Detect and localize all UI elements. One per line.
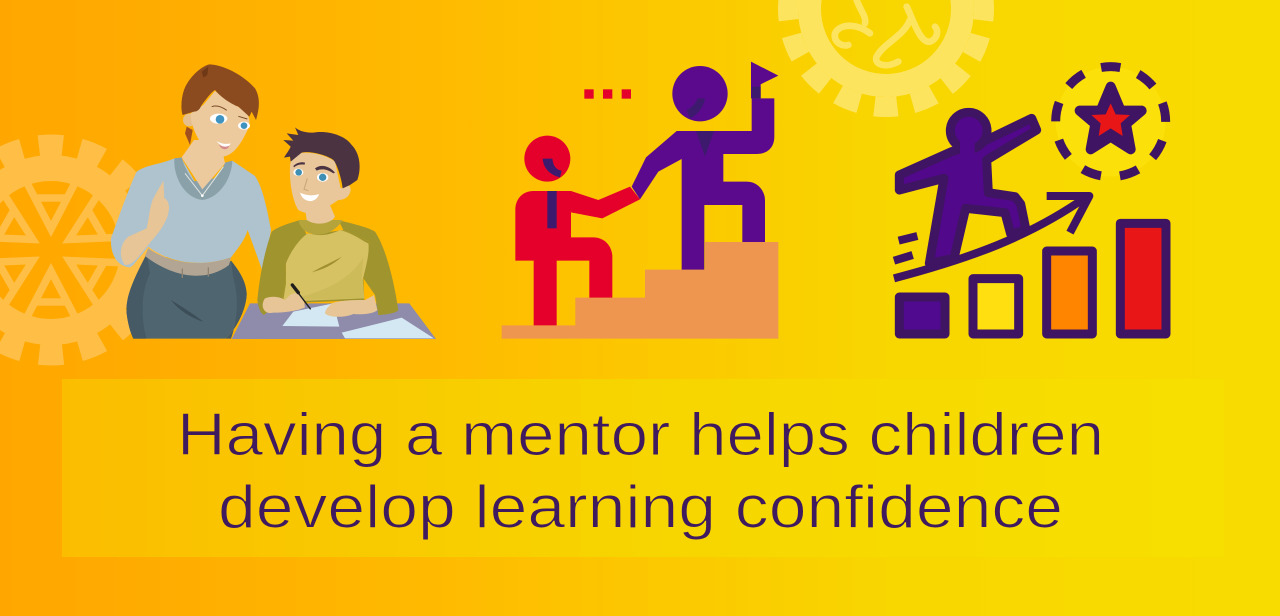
mentor head — [181, 64, 259, 157]
student head — [283, 127, 360, 224]
red climber — [515, 136, 640, 325]
rising arrow and speed lines — [894, 196, 1089, 278]
dots — [584, 89, 631, 99]
stairs — [502, 242, 778, 339]
papers, hands and pen — [263, 284, 434, 338]
icon: climber reaching a star over rising bars — [894, 58, 1174, 334]
gear: top centre — [788, 0, 984, 107]
bars — [899, 223, 1166, 334]
table — [232, 303, 436, 339]
caption text — [177, 401, 1104, 540]
caption text: Having a mentor helps children — [177, 401, 1104, 468]
icon: mentor helping a climber up the stairs — [502, 62, 778, 339]
purple mentor — [632, 62, 778, 270]
caption text: develop learning confidence — [218, 474, 1063, 540]
mentor body — [111, 140, 271, 339]
star badge — [1047, 58, 1174, 185]
illustration: mentor and student — [111, 64, 436, 339]
gear: left — [0, 145, 156, 355]
student body — [257, 220, 398, 315]
caption panel — [62, 379, 1224, 557]
snowboarding figure — [899, 112, 1037, 263]
